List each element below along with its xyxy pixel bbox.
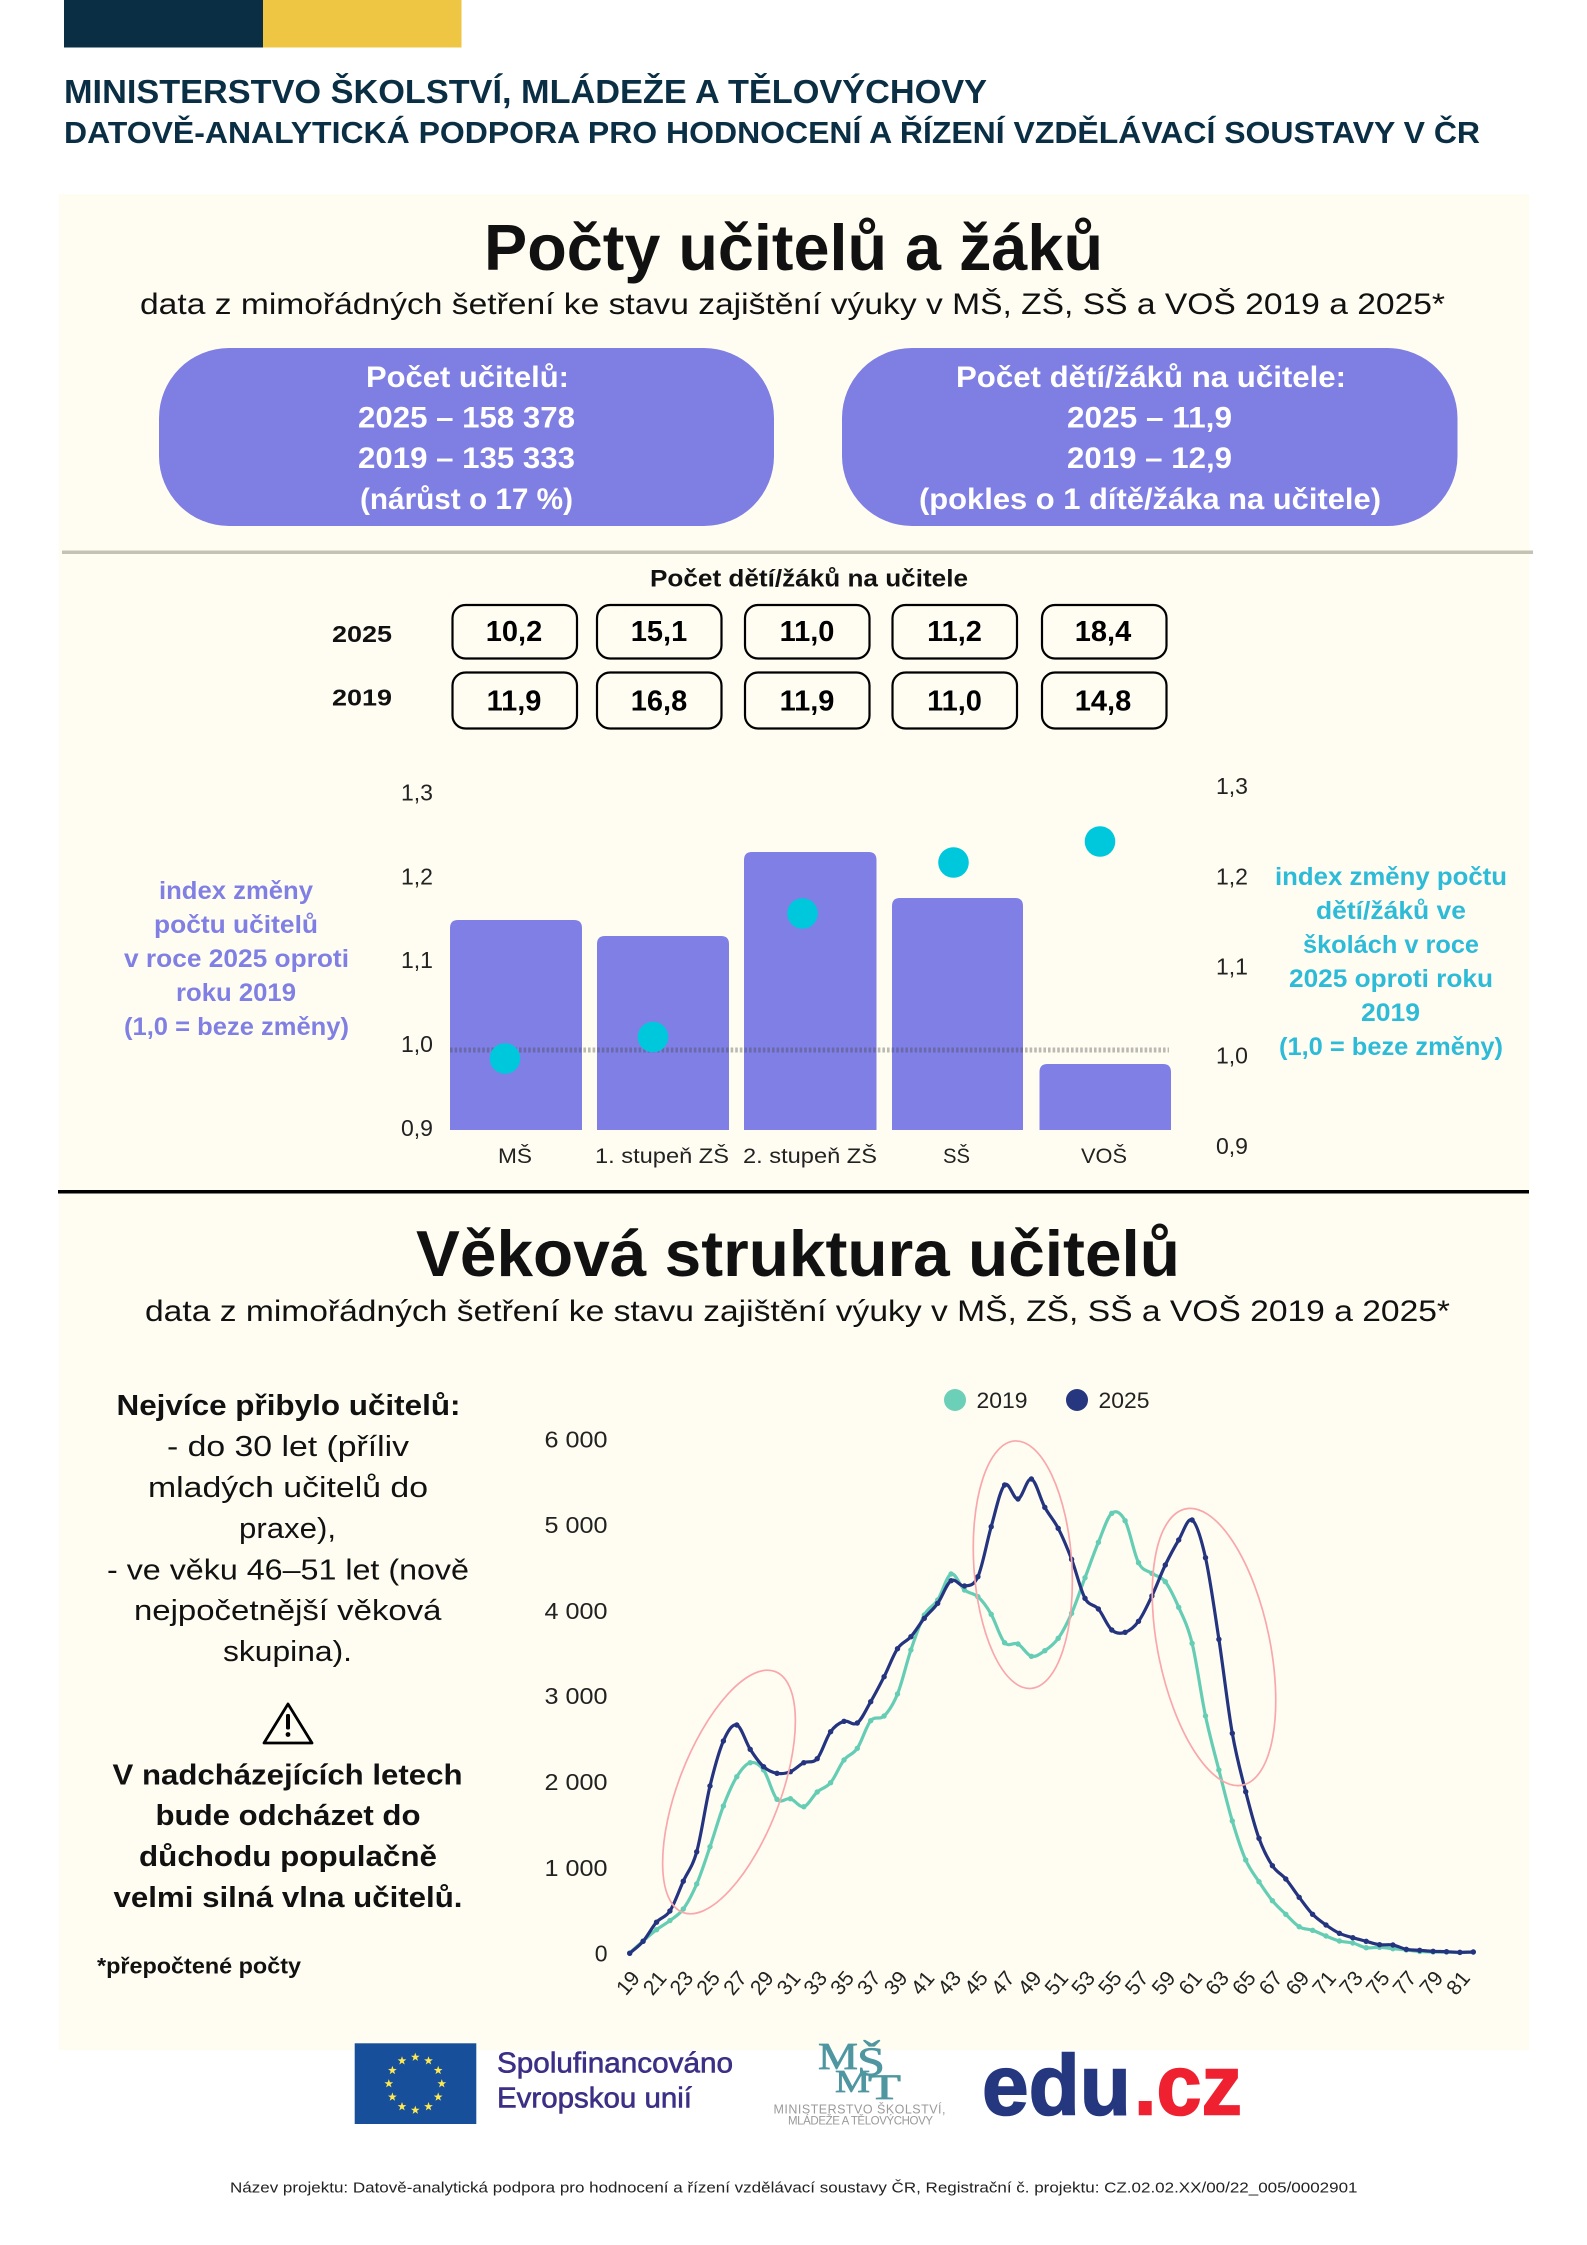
right axis: 1,2 (1216, 864, 1248, 890)
right axis note: školách v roce (1303, 931, 1479, 959)
text block: most teachers added: skupina). (223, 1636, 352, 1668)
x axis labels: 67 (1255, 1967, 1287, 2000)
footer project note: Název projektu: Datově-analytická podpora pro hodnocení a řízení vzdělávací soustavy ČR, Registrační č. projektu: CZ.02.02.XX/00/22_005/0002901 (230, 2180, 1358, 2197)
logo text: co-financed by the EU: Spolufinancováno (497, 2048, 733, 2080)
line chart: age structure (544, 1388, 1475, 2000)
right axis note: 2025 oproti roku (1289, 965, 1493, 993)
x axis labels: 37 (853, 1967, 886, 2000)
y axis labels: 4 000 (544, 1598, 608, 1624)
logo: MSMT: MINISTERSTVO ŠKOLSTVÍ, (774, 2102, 946, 2116)
y axis labels (544, 1426, 608, 1966)
callout: number of teachers: 2025 – 158 378 (358, 402, 575, 434)
values: 14,8 (1075, 686, 1131, 718)
x axis labels: 57 (1121, 1967, 1154, 2000)
right axis: 1,3 (1216, 773, 1248, 799)
y axis labels: 0 (595, 1940, 608, 1966)
x axis labels: 35 (826, 1967, 859, 2000)
legend (944, 1388, 1150, 1413)
bars (450, 852, 1171, 1130)
values (486, 616, 1131, 718)
callout: number of teachers: (nárůst o 17 %) (360, 483, 573, 516)
left axis note: roku 2019 (176, 979, 296, 1007)
x axis labels: 39 (880, 1967, 913, 2000)
x axis labels: 51 (1041, 1967, 1073, 2000)
right axis (1216, 773, 1248, 1159)
logo: edu.cz (982, 2038, 1242, 2134)
left axis: 1,0 (401, 1031, 433, 1057)
text block: most teachers added: - do 30 let (příliv (167, 1431, 410, 1463)
right axis note: index změny počtu (1275, 863, 1507, 891)
x axis labels (612, 1967, 1475, 2000)
logo: MSMT (774, 2036, 946, 2128)
x axis labels: 25 (692, 1967, 725, 2000)
row labels: 2019 (332, 684, 392, 710)
x axis labels: 63 (1201, 1967, 1234, 2000)
logo: MSMT: Š (857, 2039, 885, 2084)
highlight ellipses (635, 1438, 1297, 1931)
left axis note: index změny (159, 877, 313, 905)
table heading: Počet dětí/žáků na učitele (650, 566, 968, 592)
left axis: 1,1 (401, 947, 433, 973)
x axis labels: 49 (1014, 1967, 1046, 2000)
text block: most teachers added (107, 1390, 469, 1668)
callout: children per teacher (842, 348, 1458, 526)
text block: retirement warning: bude odcházet do (156, 1800, 420, 1832)
logo: MSMT: MLÁDEŽE A TĚLOVÝCHOVY (788, 2114, 933, 2128)
values: 15,1 (631, 616, 687, 648)
right axis: 0,9 (1216, 1133, 1248, 1159)
header text (64, 72, 1480, 150)
dots (490, 826, 1115, 1074)
row labels (332, 621, 392, 710)
right axis note (1275, 863, 1507, 1061)
x axis labels: 77 (1389, 1967, 1421, 2000)
line: 2019 (630, 1512, 1473, 1953)
x axis labels: 73 (1335, 1967, 1368, 2000)
values: 11,0 (927, 686, 982, 718)
x axis labels: 61 (1174, 1967, 1207, 2000)
x axis labels: 41 (907, 1967, 939, 2000)
legend: 2025 (1098, 1388, 1150, 1413)
x axis labels: 33 (799, 1967, 832, 2000)
text block: retirement warning: velmi silná vlna učitelů. (114, 1882, 462, 1914)
category labels: MŠ (498, 1145, 532, 1168)
right axis note: (1,0 = beze změny) (1279, 1033, 1503, 1061)
icon: warning triangle (264, 1704, 312, 1743)
text block: retirement warning: důchodu populačně (139, 1841, 437, 1873)
text block: retirement warning (112, 1760, 462, 1914)
values: 11,9 (487, 686, 541, 718)
header text: DATOVĚ-ANALYTICKÁ PODPORA PRO HODNOCENÍ A ŘÍZENÍ VZDĚLÁVACÍ SOUSTAVY V ČR (64, 114, 1480, 150)
x axis labels: 31 (773, 1967, 805, 2000)
x axis labels: 75 (1362, 1967, 1395, 2000)
x axis labels: 45 (960, 1967, 993, 2000)
logo text: co-financed by the EU (497, 2048, 733, 2114)
logo: edu.cz: edu (982, 2038, 1131, 2134)
callout: number of teachers: 2019 – 135 333 (358, 442, 575, 475)
y axis labels: 6 000 (544, 1426, 608, 1452)
row labels: 2025 (332, 621, 392, 647)
left axis note: počtu učitelů (154, 911, 318, 939)
line: 2025 (630, 1479, 1473, 1953)
logo: EU flag (355, 2043, 476, 2124)
text block: most teachers added: nejpočetnější věková (134, 1595, 442, 1627)
left axis: 0,9 (401, 1115, 433, 1141)
callout: children per teacher: 2025 – 11,9 (1067, 402, 1232, 434)
bar chart: index of change (401, 773, 1248, 1168)
category labels (498, 1145, 1127, 1168)
right axis: 1,0 (1216, 1042, 1248, 1068)
x axis labels: 27 (719, 1967, 752, 2000)
text block: most teachers added: mladých učitelů do (148, 1472, 428, 1504)
logo: MSMT: M (818, 2036, 858, 2078)
y axis labels: 2 000 (544, 1769, 608, 1795)
left axis: 1,3 (401, 780, 433, 806)
section 2 subtitle: data z mimořádných šetření ke stavu zajištění výuky v MŠ, ZŠ, SŠ a VOŠ 2019 a 2025* (145, 1294, 1450, 1328)
category labels: SŠ (943, 1145, 970, 1168)
y axis labels: 3 000 (544, 1683, 608, 1709)
x axis labels: 71 (1308, 1967, 1341, 2000)
x axis labels: 59 (1148, 1967, 1180, 2000)
callout: children per teacher: 2019 – 12,9 (1067, 442, 1232, 475)
section 1 title: Počty učitelů a žáků (484, 211, 1103, 284)
values: 18,4 (1075, 616, 1131, 648)
values: 11,0 (780, 616, 834, 648)
x axis labels: 55 (1094, 1967, 1127, 2000)
x axis labels: 79 (1415, 1967, 1448, 2000)
left axis note (124, 877, 349, 1041)
x axis labels: 19 (612, 1967, 645, 2000)
callout: number of teachers (159, 348, 774, 526)
values: 11,2 (927, 616, 982, 648)
y axis labels: 5 000 (544, 1512, 608, 1538)
section 1 subtitle: data z mimořádných šetření ke stavu zajištění výuky v MŠ, ZŠ, SŠ a VOŠ 2019 a 2025* (140, 287, 1445, 321)
logo text: co-financed by the EU: Evropskou unií (497, 2082, 692, 2114)
left axis: 1,2 (401, 864, 433, 890)
text block: retirement warning: V nadcházejících letech (112, 1760, 462, 1792)
category labels: VOŠ (1081, 1145, 1127, 1168)
right axis: 1,1 (1216, 954, 1248, 980)
left axis note: v roce 2025 oproti (124, 945, 349, 973)
values: 10,2 (486, 616, 542, 648)
logo: edu.cz: .cz (1134, 2038, 1242, 2134)
value boxes (452, 605, 1166, 728)
callout: number of teachers: Počet učitelů: (366, 361, 569, 394)
legend: 2019 (976, 1388, 1028, 1413)
right axis note: 2019 (1361, 999, 1420, 1027)
left axis note: (1,0 = beze změny) (124, 1013, 349, 1041)
x axis labels: 43 (933, 1967, 966, 2000)
callout: children per teacher: Počet dětí/žáků na učitele: (956, 361, 1346, 394)
x axis labels: 69 (1282, 1967, 1314, 2000)
left axis (401, 780, 433, 1141)
category labels: 1. stupeň ZŠ (595, 1145, 729, 1168)
header colour blocks (64, 0, 462, 48)
header text: MINISTERSTVO ŠKOLSTVÍ, MLÁDEŽE A TĚLOVÝCHOVY (64, 72, 987, 110)
right axis note: dětí/žáků ve (1316, 897, 1466, 925)
panel: cream background (58, 194, 1530, 2050)
x axis labels: 53 (1067, 1967, 1100, 2000)
category labels: 2. stupeň ZŠ (743, 1145, 877, 1168)
y axis labels: 1 000 (544, 1855, 608, 1881)
text block: most teachers added: praxe), (239, 1513, 336, 1545)
table: children per teacher by school level (332, 605, 1166, 728)
text block: most teachers added: Nejvíce přibylo učitelů: (116, 1390, 460, 1422)
values: 11,9 (780, 686, 834, 718)
values: 16,8 (631, 686, 687, 718)
text block: most teachers added: - ve věku 46–51 let (nově (107, 1554, 469, 1586)
section 2 title: Věková struktura učitelů (416, 1217, 1180, 1290)
logo: MSMT: M (835, 2063, 870, 2099)
footnote: *přepočtené počty (97, 1954, 302, 1978)
x axis labels: 47 (987, 1967, 1020, 2000)
callout: children per teacher: (pokles o 1 dítě/žáka na učitele) (919, 483, 1381, 516)
x axis labels: 23 (666, 1967, 698, 2000)
x axis labels: 65 (1228, 1967, 1261, 2000)
x axis labels: 21 (639, 1967, 672, 2000)
x axis labels: 81 (1442, 1967, 1475, 2000)
logo: MSMT: T (868, 2067, 901, 2107)
x axis labels: 29 (746, 1967, 779, 2000)
